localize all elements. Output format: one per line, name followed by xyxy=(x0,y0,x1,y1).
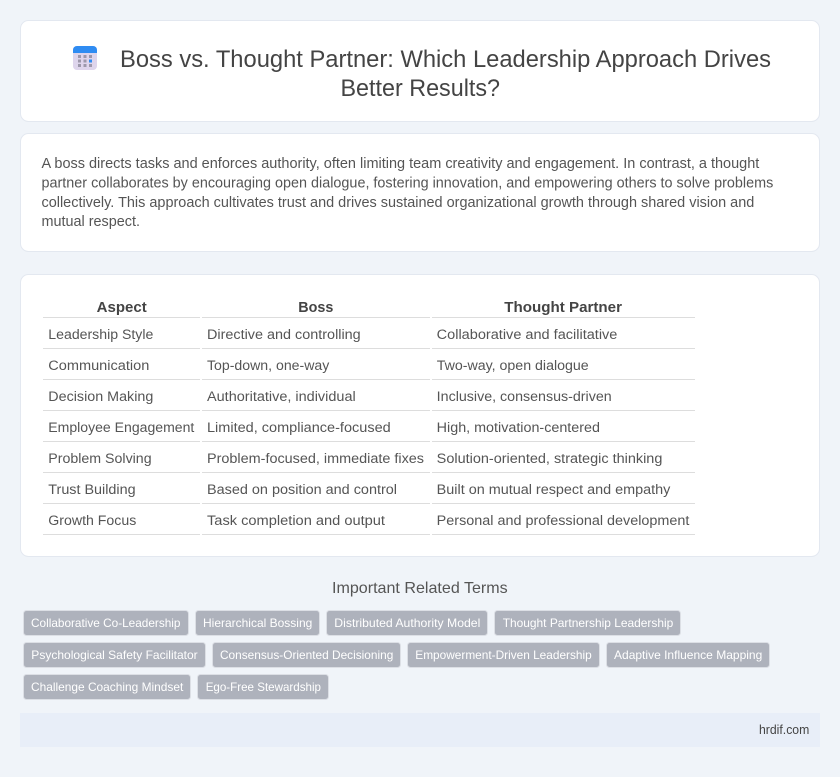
tag: Empowerment-Driven Leadership: Empowerment-Driven Leadership xyxy=(415,648,592,662)
tag: Challenge Coaching Mindset: Challenge Coaching Mindset xyxy=(31,680,184,694)
table row: Decision Making: Inclusive, consensus-driven xyxy=(437,389,612,405)
table row: Employee Engagement xyxy=(43,420,695,442)
table row: Decision Making xyxy=(43,389,695,411)
footer bar xyxy=(20,713,820,747)
icon: calendar xyxy=(73,46,97,70)
text block: introduction paragraph: A boss directs tasks and enforces authority, often limiting team creativity and engagement. In contrast, a thought xyxy=(42,156,759,172)
tag: Psychological Safety Facilitator: Psychological Safety Facilitator xyxy=(31,648,198,662)
table row: Problem Solving: Problem-focused, immediate fixes xyxy=(207,451,424,467)
table row: Communication: Top-down, one-way xyxy=(207,358,330,374)
table row: Leadership Style: Leadership Style xyxy=(48,327,153,343)
table row: Problem Solving: Solution-oriented, strategic thinking xyxy=(437,451,662,467)
tag: Adaptive Influence Mapping xyxy=(606,642,770,668)
tag: Collaborative Co-Leadership: Collaborative Co-Leadership xyxy=(31,616,181,630)
table row: Employee Engagement: Employee Engagement xyxy=(48,420,194,436)
text block: introduction paragraph xyxy=(42,156,773,230)
tag: Ego-Free Stewardship: Ego-Free Stewardship xyxy=(206,680,321,694)
table row: Problem Solving: Problem Solving xyxy=(48,451,152,467)
table row: Trust Building: Built on mutual respect and empathy xyxy=(437,482,671,498)
table row: Growth Focus: Growth Focus xyxy=(48,513,136,529)
table header row: Boss xyxy=(298,300,333,316)
tag: Adaptive Influence Mapping: Adaptive Influence Mapping xyxy=(614,648,762,662)
tag: Thought Partnership Leadership: Thought Partnership Leadership xyxy=(503,616,674,630)
table row: Employee Engagement: High, motivation-centered xyxy=(437,420,600,436)
panel: title card xyxy=(20,20,820,122)
table row: Leadership Style: Directive and controlling xyxy=(207,327,361,343)
tag: Collaborative Co-Leadership xyxy=(24,610,188,636)
title xyxy=(120,46,771,102)
table row: Decision Making: Authoritative, individual xyxy=(207,389,356,405)
tag: Consensus-Oriented Decisioning xyxy=(212,642,400,668)
table header row: Aspect xyxy=(97,300,147,316)
table row: Leadership Style xyxy=(43,327,695,349)
tag: Hierarchical Bossing xyxy=(196,610,320,636)
table row: Problem Solving xyxy=(43,451,695,473)
tag: Thought Partnership Leadership xyxy=(494,610,680,636)
title: Boss vs. Thought Partner: Which Leadership Approach Drives xyxy=(120,46,771,73)
tag: Challenge Coaching Mindset xyxy=(24,674,190,700)
panel: introduction xyxy=(20,134,820,252)
tag: Psychological Safety Facilitator xyxy=(24,642,206,668)
tag: Ego-Free Stewardship xyxy=(198,674,328,700)
tag: Empowerment-Driven Leadership xyxy=(408,642,600,668)
tag: Hierarchical Bossing: Hierarchical Bossing xyxy=(203,616,312,630)
tag: Distributed Authority Model xyxy=(326,610,488,636)
table row: Growth Focus: Personal and professional development xyxy=(437,513,689,529)
table row: Trust Building: Based on position and control xyxy=(207,482,397,498)
table header row xyxy=(43,300,695,318)
text block: introduction paragraph: collectively. This approach cultivates trust and drives sustained organizational growth through shared vision and xyxy=(42,195,754,211)
table row: Growth Focus xyxy=(43,513,695,535)
panel: comparison table xyxy=(20,274,820,556)
text block: introduction paragraph: partner collaborates by encouraging open dialogue, fostering innovation, and empowering others to solve problems xyxy=(42,176,773,192)
text block: introduction paragraph: mutual respect. xyxy=(42,214,140,230)
panel: related term tags xyxy=(24,610,770,700)
tag: Distributed Authority Model: Distributed Authority Model xyxy=(334,616,480,630)
tag: Consensus-Oriented Decisioning: Consensus-Oriented Decisioning xyxy=(220,648,393,662)
heading: Important Related Terms: Important Related Terms xyxy=(332,580,508,597)
table row: Trust Building xyxy=(43,482,695,504)
table row: Growth Focus: Task completion and output xyxy=(207,513,385,529)
table header row: Thought Partner xyxy=(504,300,622,316)
table row: Decision Making: Decision Making xyxy=(48,389,153,405)
table row: Communication: Communication xyxy=(48,358,149,374)
table row: Employee Engagement: Limited, compliance-focused xyxy=(207,420,391,436)
footer source text: hrdif.com xyxy=(759,722,809,737)
table row: Communication xyxy=(43,358,695,380)
title: Better Results? xyxy=(340,75,500,102)
table row: Communication: Two-way, open dialogue xyxy=(437,358,589,374)
table row: Trust Building: Trust Building xyxy=(48,482,136,498)
table row: Leadership Style: Collaborative and facilitative xyxy=(437,327,618,343)
